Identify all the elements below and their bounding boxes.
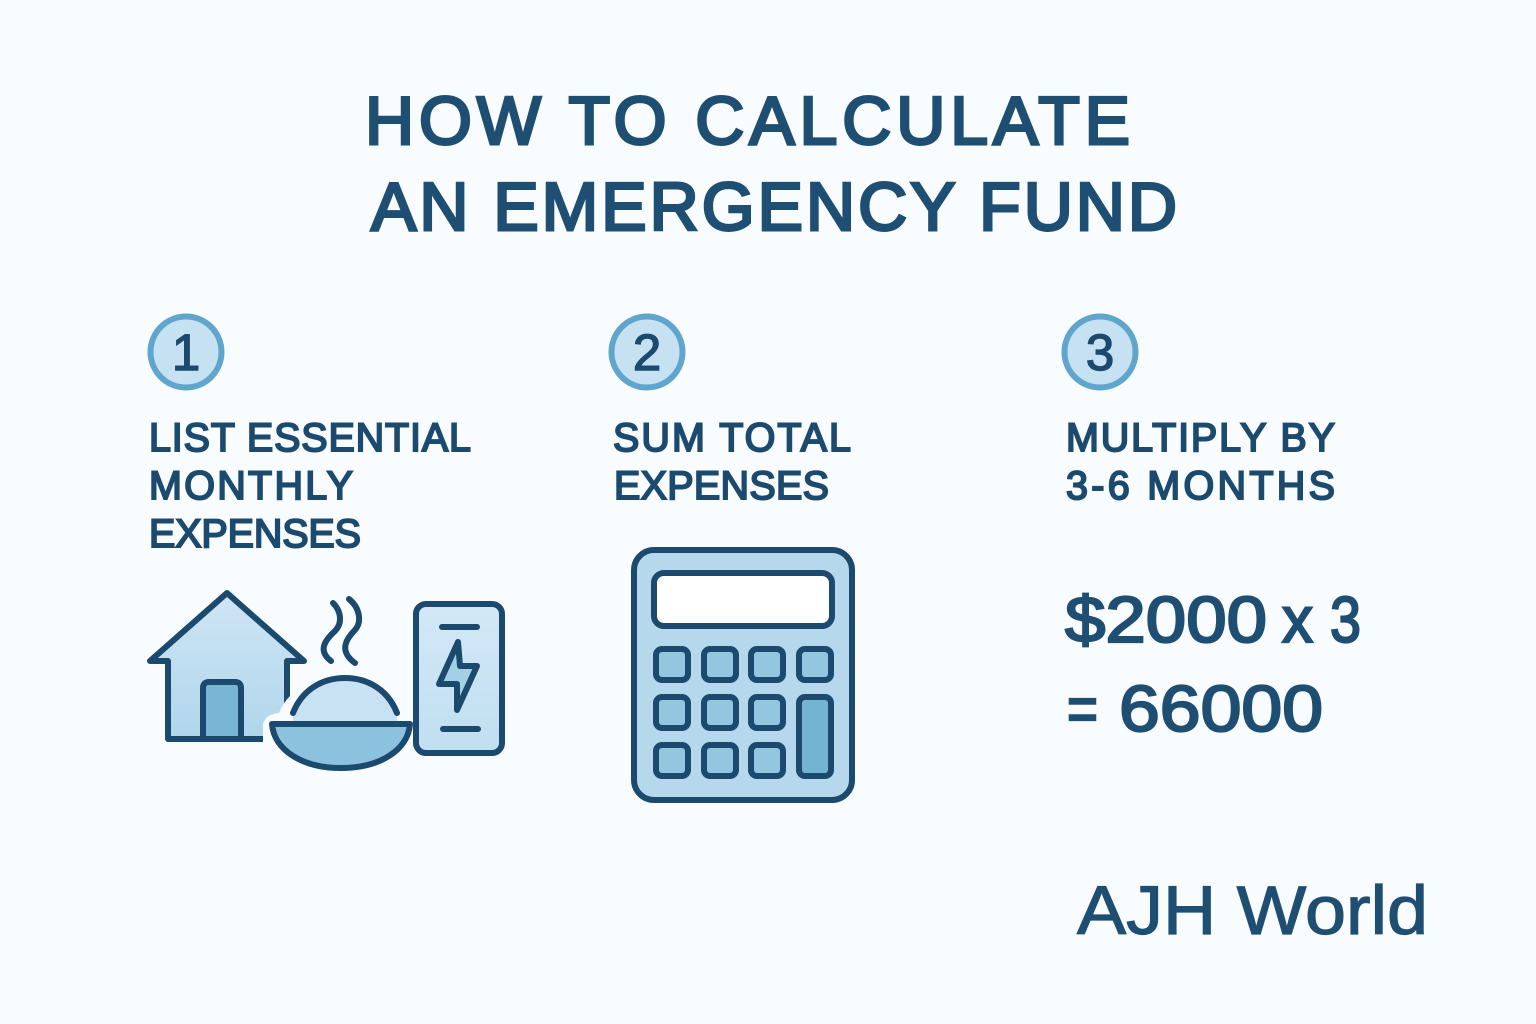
step 1 heading: LIST ESSENTIAL [149, 416, 471, 460]
step 3 heading: MULTIPLY BY [1066, 416, 1335, 460]
step 3 heading [1066, 416, 1335, 508]
title: AN EMERGENCY FUND [371, 169, 1177, 245]
panel: step 2 sum expenses [612, 316, 852, 800]
step 3 number badge [1064, 316, 1136, 388]
brand wordmark: AJH World [1077, 872, 1428, 949]
step 2 number badge: 2 [633, 324, 661, 381]
step 1 number badge [150, 316, 222, 388]
step 1 heading [149, 416, 471, 556]
step 2 heading: SUM TOTAL [613, 416, 851, 460]
calculation formula: $2000 [1065, 583, 1267, 656]
icon: calculator [634, 550, 852, 800]
calculation formula: x [1282, 583, 1313, 656]
step 2 heading [613, 416, 851, 508]
step 1 number badge: 1 [172, 324, 200, 381]
icon: house [150, 593, 304, 739]
step 3 number badge: 3 [1086, 324, 1114, 381]
step 2 heading: EXPENSES [614, 464, 829, 508]
step 1 heading: MONTHLY [149, 464, 353, 508]
step 1 heading: EXPENSES [149, 512, 361, 556]
calculation formula: = [1067, 672, 1098, 745]
title [365, 83, 1177, 245]
calculation formula: 66000 [1119, 672, 1323, 745]
step 3 heading: 3-6 MONTHS [1066, 464, 1335, 508]
icon: utility phone with lightning bolt [416, 604, 502, 753]
title: HOW TO CALCULATE [365, 83, 1130, 159]
calculation formula: 3 [1330, 583, 1361, 656]
calculation formula [1065, 583, 1361, 745]
icon: steaming bowl [272, 599, 410, 768]
panel: step 3 multiply [1064, 316, 1361, 745]
icon: white halo behind bowl [263, 696, 420, 780]
step 2 number badge [612, 316, 682, 388]
panel: step 1 list expenses [149, 316, 502, 780]
